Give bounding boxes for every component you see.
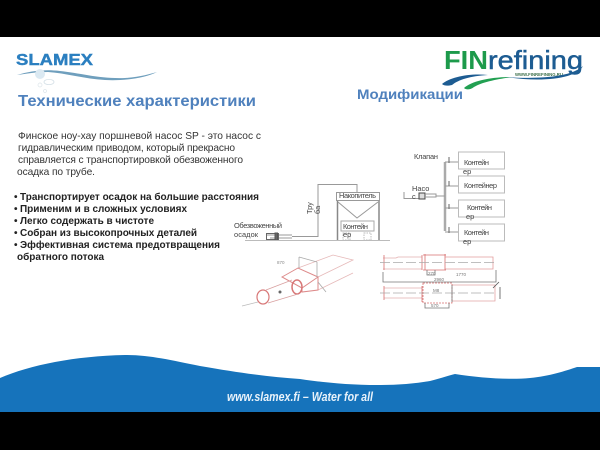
diagram labels left: Контейн [343,222,368,231]
intro paragraph: Финское ноу-хау поршневой насос SP - это насос с [18,131,261,142]
diagram labels right: ер [463,237,471,246]
intro paragraph: гидравлическим приводом, который прекрасно [18,143,235,154]
diagram labels right [412,152,497,246]
bottom black bar [0,412,600,450]
intro paragraph [17,131,261,178]
technical drawing: side and top views: 570 [431,303,439,308]
diagram labels left: Накопитель [339,191,376,200]
diagram labels left: осадок [234,230,259,239]
feature bullet list: Собран из высокопрочных деталей [20,227,197,239]
logo: FINrefining [442,45,583,89]
technical drawing: side and top views: 2960 [434,277,445,282]
technical drawing: isometric pump [242,255,353,306]
diagram labels left: ер [343,230,351,239]
feature bullet list: • [14,228,18,239]
logo: FINrefining: refining [488,45,583,75]
diagram labels right: с [412,192,416,201]
diagram labels right: Контейн [464,228,489,237]
feature bullet list: Транспортирует осадок на большие расстояния [20,191,259,203]
feature bullet list: обратного потока [17,251,104,263]
logo: FINrefining: WWW.FINREFINING.RU [515,72,563,77]
diagram: pump with four containers [404,152,504,241]
footer band [0,355,600,412]
footer text: www.slamex.fi – Water for all [227,390,373,404]
intro paragraph: справляется с транспортировкой обезвоженного [18,154,243,166]
diagram labels left: Обезвоженный [234,221,282,230]
top black bar [0,0,600,37]
logo: FINrefining: FIN [444,45,488,75]
technical drawing: side and top views: 1770 [456,272,467,277]
technical drawing: isometric pump: 870 [277,260,285,265]
diagram labels left: Тру [305,202,314,214]
feature bullet list: • [14,204,18,215]
technical drawing: side and top views: 270 [428,271,436,276]
feature bullet list: Применим и в сложных условиях [20,204,187,215]
feature bullet list: • [14,216,18,227]
diagram: pump to storage silo [245,184,390,240]
diagram labels right: Клапан [414,152,438,161]
heading: modifications: Модификации [357,86,463,102]
diagram labels right: Контейн [467,203,492,212]
feature bullet list: • [14,240,18,251]
feature bullet list: Легко содержать в чистоте [20,216,154,227]
intro paragraph: осадка по трубе. [17,166,95,178]
diagram labels right: Контейнер [464,181,497,190]
diagram labels right: ер [466,212,474,221]
diagram labels right: Контейн [464,158,489,167]
feature bullet list [14,191,259,263]
feature bullet list: Эффективная система предотвращения [20,239,220,251]
logo: SLAMEX: SLAMEX [16,52,94,69]
diagram labels left [234,191,376,239]
diagram labels left: ба [313,205,322,214]
technical drawing: side and top views: M8 [433,288,440,293]
logo: SLAMEX [16,52,157,92]
diagram labels right: ер [463,167,471,176]
feature bullet list: • [14,192,18,203]
diagram labels right: Насо [412,184,429,193]
heading: technical characteristics: Технические характеристики [18,93,256,110]
technical drawing: side and top views [380,254,500,308]
